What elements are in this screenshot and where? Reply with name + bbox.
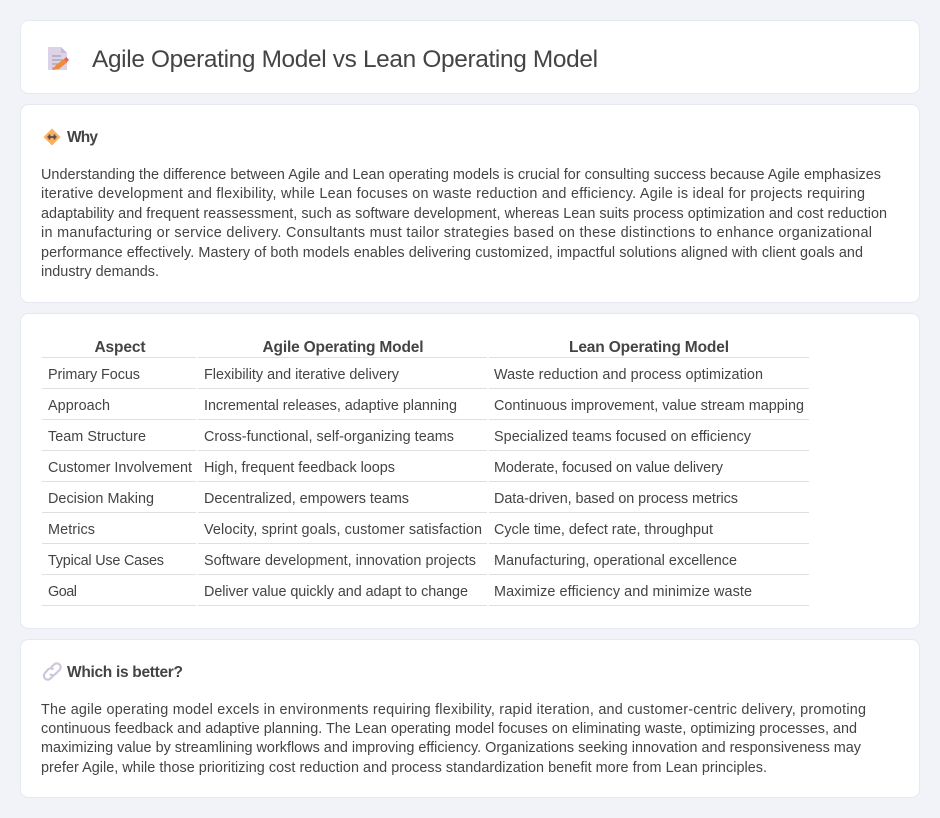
table header: Agile Operating Model — [262, 339, 424, 356]
heading: which is better: Which is better? — [67, 664, 183, 681]
row: metrics — [48, 522, 713, 538]
row: team structure: Team Structure — [48, 429, 146, 445]
table header: Aspect — [94, 339, 146, 356]
row: goal: Maximize efficiency and minimize waste — [494, 584, 752, 600]
row: approach: Approach — [48, 398, 110, 414]
text block: which is better paragraph: The agile operating model excels in environments requiring flexibility, rapid iteration, and customer-centric delivery, promoting — [41, 702, 866, 718]
text block: why paragraph: iterative development and flexibility, while Lean focuses on waste reduction and efficiency. Agile is ideal for projects requiring — [41, 186, 865, 202]
icon: chain link — [44, 663, 61, 680]
row: customer involvement: Customer Involvement — [48, 460, 192, 476]
table header: Lean Operating Model — [569, 339, 729, 356]
text block: why paragraph — [41, 167, 887, 280]
row: typical use cases: Software development, innovation projects — [204, 553, 476, 569]
row: typical use cases: Manufacturing, operational excellence — [494, 553, 737, 569]
text block: which is better paragraph: maximizing value by streamlining workflows and improving efficiency. Organizations seeking innovation and responsiveness may — [41, 740, 862, 756]
row: goal: Deliver value quickly and adapt to change — [204, 584, 468, 600]
row: approach: Incremental releases, adaptive planning — [204, 398, 457, 414]
row: decision making — [48, 491, 738, 507]
row: customer involvement — [48, 460, 724, 476]
row: primary focus: Waste reduction and process optimization — [494, 367, 763, 383]
panel: why — [20, 104, 920, 302]
text block: which is better paragraph: continuous feedback and adaptive planning. The Lean operating model focuses on eliminating waste, optimizing processes, and — [41, 721, 857, 737]
row: customer involvement: High, frequent feedback loops — [204, 460, 395, 476]
text block: why paragraph: in manufacturing or service delivery. Consultants must tailor strategies based on these distinctions to enhance organizational — [41, 225, 872, 241]
text block: why paragraph: Understanding the difference between Agile and Lean operating models is crucial for consulting success because Agile emphasizes — [41, 167, 881, 183]
row: approach: Continuous improvement, value stream mapping — [494, 398, 804, 414]
row: team structure: Cross-functional, self-organizing teams — [204, 429, 454, 445]
row: primary focus — [48, 367, 763, 383]
row: team structure: Specialized teams focused on efficiency — [494, 429, 752, 445]
text block: which is better paragraph: prefer Agile, while those prioritizing cost reduction and process standardization benefit more from Lean principles. — [41, 760, 767, 776]
heading: why: Why — [67, 129, 98, 146]
row: primary focus: Primary Focus — [48, 367, 140, 383]
row: approach — [48, 398, 804, 414]
row: goal — [48, 584, 752, 600]
row: typical use cases — [48, 553, 737, 569]
table header — [94, 339, 729, 356]
panel: comparison table — [20, 314, 920, 628]
row: metrics: Velocity, sprint goals, customer satisfaction — [204, 522, 482, 538]
row: team structure — [48, 429, 752, 445]
row: goal: Goal — [48, 584, 77, 600]
text block: why paragraph: industry demands. — [41, 264, 159, 280]
title: Agile Operating Model vs Lean Operating Model — [92, 46, 598, 73]
row: primary focus: Flexibility and iterative delivery — [204, 367, 400, 383]
text block: which is better paragraph — [41, 702, 866, 776]
text block: why paragraph: adaptability and frequent reassessment, such as software development, whereas Lean suits process optimization and cost reduction — [41, 206, 887, 222]
panel: which is better — [20, 640, 920, 798]
icon: document with pencil — [48, 47, 69, 70]
text block: why paragraph: performance effectively. Mastery of both models enables delivering customized, impactful solutions aligned with client goals and — [41, 245, 863, 261]
row: typical use cases: Typical Use Cases — [48, 553, 164, 569]
row: decision making: Decentralized, empowers teams — [204, 491, 409, 507]
table rules — [42, 358, 809, 606]
row: customer involvement: Moderate, focused on value delivery — [494, 460, 724, 476]
row: metrics: Cycle time, defect rate, throughput — [494, 522, 713, 538]
row: decision making: Data-driven, based on process metrics — [494, 491, 738, 507]
row: metrics: Metrics — [48, 522, 95, 538]
panel: title header — [20, 20, 920, 94]
row: decision making: Decision Making — [48, 491, 154, 507]
icon: orange diamond sign — [44, 128, 60, 146]
